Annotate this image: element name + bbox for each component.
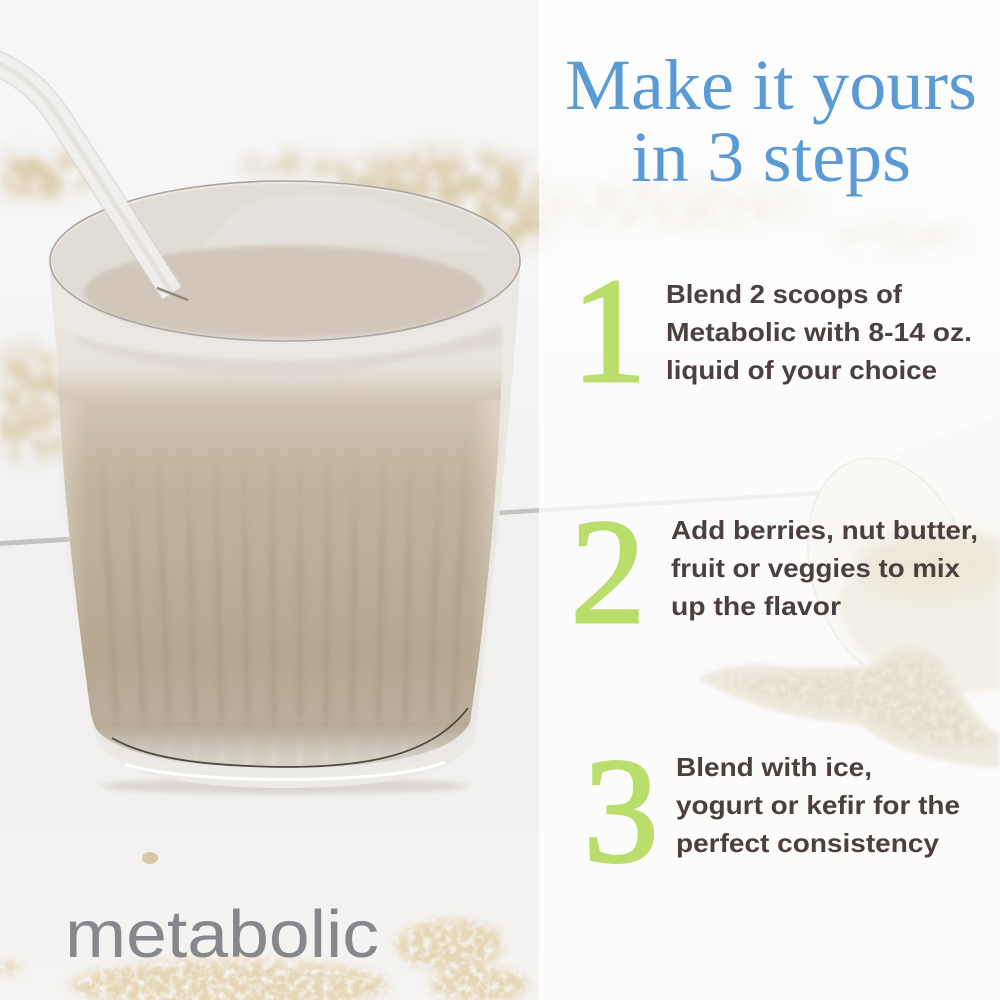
scattered powder behind the glass [0,150,970,461]
step 2 text: Add berries, nut butter, [671,515,978,545]
step 3 text: Blend with ice, [676,752,872,782]
title [565,45,977,197]
powder pile near tub [698,646,1000,768]
glass base [91,714,475,788]
step 3 text: yogurt or kefir for the [676,790,960,820]
title: Make it yours [565,45,977,125]
powder crumb [142,852,158,864]
base highlight [125,762,445,780]
step 1 [572,248,972,414]
residue highlight [200,193,500,258]
translucent white panel [539,0,1000,1000]
glass straw [0,62,188,300]
powder tub lying on its side [780,415,1000,703]
front glass band above foam [70,325,502,383]
step 2 text: fruit or veggies to mix [671,553,961,583]
step 1 text: Metabolic with 8-14 oz. [666,317,972,347]
step 3 [584,728,960,894]
step 3 text: perfect consistency [676,828,940,858]
smoothie liquid [56,325,503,768]
step 2 text: up the flavor [671,591,841,621]
step 2 [570,489,978,655]
step 1 text: liquid of your choice [666,355,937,385]
foreground powder [0,919,530,1000]
glass shadow [100,778,470,794]
numeral 2: 2 [570,489,646,655]
liquid ridges [100,420,467,768]
drinking glass with smoothie [50,180,520,794]
dark liquid line [112,708,468,767]
upper inner glass with residue [52,184,518,340]
numeral 3: 3 [584,728,658,894]
title: in 3 steps [631,117,911,197]
logo: metabolic: metabolic [65,897,379,972]
rim [50,181,520,341]
step 1 text: Blend 2 scoops of [666,279,902,309]
numeral 1: 1 [572,248,646,414]
side shading [56,400,503,722]
smoothie surface [84,246,484,338]
glass body [50,180,520,788]
